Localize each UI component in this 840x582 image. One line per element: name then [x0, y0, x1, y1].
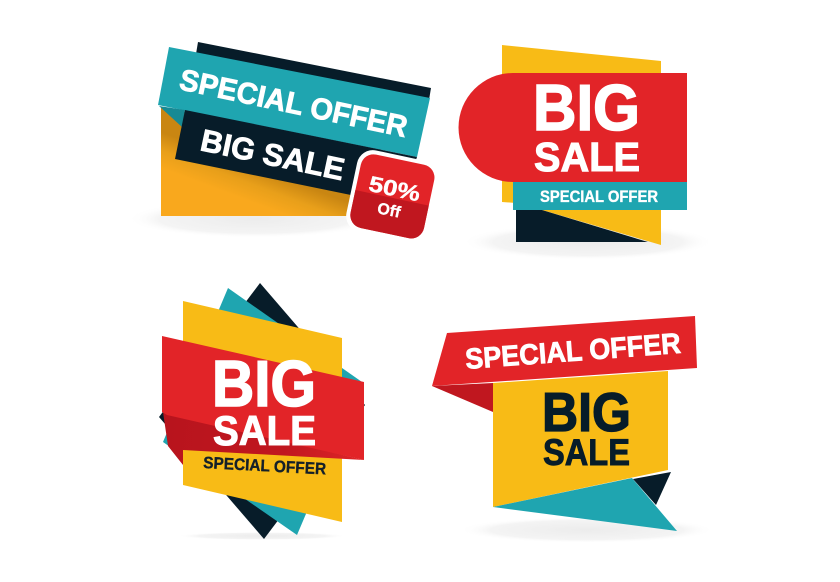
floor shadow: [177, 532, 347, 540]
floor shadow: [459, 517, 715, 543]
red ribbon: [162, 336, 364, 460]
dark ribbon: [175, 110, 417, 205]
floor shadow: [462, 224, 714, 260]
teal bar: [513, 182, 687, 210]
text: special offer: SPECIAL OFFER: [540, 188, 658, 206]
text: sale: SALE: [213, 407, 316, 454]
banner: special offer red ribbon top: [432, 316, 715, 543]
dark diamond: [159, 283, 365, 539]
red fold: [432, 383, 493, 412]
red pill: [459, 73, 687, 182]
badge: 50% off: [343, 147, 442, 246]
teal diamond: [163, 288, 362, 535]
text: sale: SALE: [534, 134, 640, 180]
banner: special offer big sale 50% off: [127, 42, 442, 246]
text: big: BIG: [542, 381, 631, 443]
banner: big sale red pill: [459, 45, 714, 260]
red ribbon: [432, 316, 697, 386]
text: sale: SALE: [543, 432, 630, 473]
teal triangle: [493, 478, 677, 531]
dark base: [516, 210, 648, 242]
text: special offer: SPECIAL OFFER: [464, 328, 682, 376]
dark triangle: [633, 472, 671, 505]
teal ribbon: [158, 47, 430, 157]
dark back strip: [195, 42, 431, 100]
banner: big sale angled ribbon: [159, 283, 365, 540]
text: special offer: SPECIAL OFFER: [177, 64, 411, 144]
text: special offer: SPECIAL OFFER: [203, 454, 327, 478]
red fold: [163, 412, 364, 465]
teal fold: [159, 106, 185, 127]
yellow panel: [493, 371, 668, 507]
yellow panel: [183, 301, 342, 522]
text: big: BIG: [212, 347, 316, 420]
yellow panel: [161, 107, 370, 216]
text: big: BIG: [533, 71, 640, 144]
badge: 50% off: Off: [376, 200, 403, 222]
yellow panel: [502, 45, 661, 245]
badge: 50% off: 50%: [367, 171, 423, 206]
floor shadow: [127, 200, 383, 238]
text: big sale: BIG SALE: [198, 123, 348, 187]
